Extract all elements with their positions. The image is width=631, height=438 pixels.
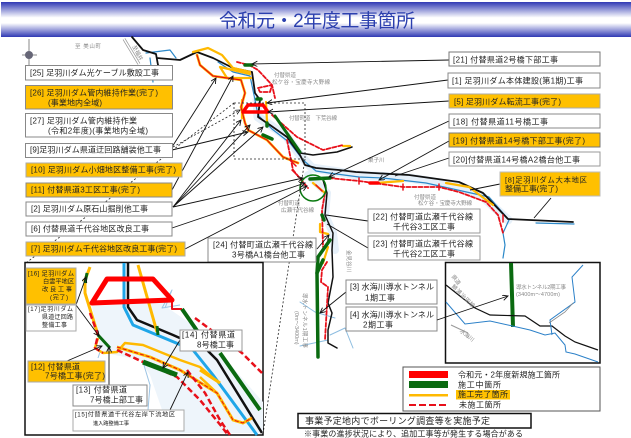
leader arrows [172,60,551,313]
panel: right inset map: 鯖浦治田線 [450,282,477,310]
box 16: [16] 足羽川ダム [28,268,74,278]
icon: compass [22,39,37,66]
inset river [446,265,598,362]
box 12: 7号橋工事(完了) [45,370,105,380]
label boxes: right column [346,52,600,331]
box 15: 進入路整備工事 [93,419,130,427]
box 22: [22] 付替町道広瀬千代谷線 [373,212,473,222]
box 11 [26,183,172,197]
green works [245,65,330,357]
box 12: [12] 付替県道 [31,362,80,372]
box 26: [26] 足羽川ダム管内維持作業(完了) [30,88,158,98]
black road [132,37,573,222]
box 24 [208,238,316,262]
box 13: [13] 付替県道 [76,384,127,394]
box 6: [6] 付替県道千代谷地区改良工事 [31,224,149,234]
panel: right inset map [446,262,600,363]
arrow: direction to Fukui [124,39,145,64]
box 3: [3] 水海川導水トンネル [350,282,434,292]
reservoir [257,100,508,220]
callout: boring survey: 事業予定地内でボーリング調査等を実施予定 [305,415,490,426]
box 24: 3号橋A1橋台他工事 [232,250,305,260]
inset black road [128,263,262,433]
box 16: 白霊平地区 [43,278,74,286]
box 16 [26,268,76,304]
map labels: 付替県道 [274,71,297,79]
map labels [272,71,472,348]
box 7 [26,242,185,256]
box 23: [23] 付替町道広瀬千代谷線 [373,238,473,248]
title: 令和元・2年度工事箇所 [219,10,415,32]
box 12 [28,361,105,382]
inset tunnel [511,263,513,327]
box 16: 改良工事 [42,286,72,294]
box 27: (令和2年度)(事業地内全域) [48,126,148,136]
box 3 [346,280,437,304]
box 22 [368,209,480,233]
box 19: [19] 付替県道14号橋下部工事(完了) [453,136,585,146]
box 9: [9]足羽川ダム県道迂回路舗装他工事 [30,144,161,154]
box 18: [18] 付替県道11号橋工事 [453,116,548,126]
blue rivers [146,50,574,258]
box 15 [73,410,184,431]
inset red dashed lines [90,313,262,435]
arrow: tunnel phase 2 [437,296,508,320]
map labels: 付替県道 [414,193,437,201]
box 13: 7号橋上部工事 [90,394,143,404]
box 3: 1期工事 [365,292,395,302]
box 23: 千代谷2工区工事 [393,248,455,258]
inset new works [92,279,172,303]
box 17: 整備工事 [42,321,67,329]
map labels: 松ケ谷・宝慶寺大野線 [272,78,330,86]
box 14: [14] 付替県道 [182,330,235,340]
legend [403,367,600,411]
yellow completed [193,48,493,263]
box 21: [21] 付替県道2号橋下部工事 [453,54,558,64]
box 27 [26,114,172,137]
box 13 [73,384,147,406]
box 8 [500,172,600,196]
main map [132,37,574,357]
box 16: (完了) [50,294,68,302]
inset road [446,285,598,350]
box 26: (事業地内全域) [48,98,102,108]
box 25 [26,66,172,80]
box 19 [449,133,600,147]
box 20: [20]付替県道14号橋A2橋台他工事 [453,154,580,164]
legend: 令和元・2年度新規施工箇所 [458,370,560,380]
red dashed [237,62,503,340]
map labels: 付替町道 下荒谷線 [289,114,337,122]
box 24: [24] 付替町道広瀬千代谷線 [213,240,313,250]
box 1: [1] 足羽川ダム本体建設(第1期)工事 [452,76,583,86]
inset green works [85,273,260,410]
box 4: 2期工事 [363,320,393,330]
inset blue river [124,263,257,435]
box 4 [346,307,437,331]
map labels: 導水トンネル1期工事 [301,293,309,348]
box 4: [4] 水海川導水トンネル [350,310,434,320]
map labels: 広瀬千代谷線 [281,206,314,214]
legend: 施工完了箇所 [458,389,508,399]
callout: boring survey [298,414,531,428]
panel: right inset map: 県道 [450,273,463,287]
box 8: [8]足羽川ダム大本地区 [505,176,588,184]
box 17 [26,305,76,331]
box 11: [11] 付替県道3工区工事(完了) [31,184,140,194]
box 5 [449,94,600,108]
box 10: [10] 足羽川ダム小畑地区整備工事(完了) [31,164,176,174]
legend: 未施工箇所 [459,400,501,410]
map labels: 金見谷川 [345,250,353,272]
inset tributaries [98,290,180,410]
box 26 [26,86,172,109]
box 6 [26,222,172,236]
inset yellow lines [85,265,157,335]
box 1 [448,73,600,88]
map labels: (0m～3400m) [293,311,299,345]
map labels: 巣子川 [368,156,385,164]
box 8: 整備工事(完了) [505,184,558,194]
box 7: [7] 足羽川ダム千代谷地区改良工事(完了) [31,244,177,254]
box 20 [449,152,600,166]
box 17: 県道迂回路 [42,313,73,321]
box 5: [5] 足羽川ダム転流工事(完了) [454,96,561,106]
legend: 施工中箇所 [458,380,501,390]
panel: right inset map: (3400m～4700m) [516,292,560,298]
box 10 [26,163,182,177]
label boxes: left column [26,66,316,262]
title [1,2,631,37]
label: direction to Miyama: 至 美山町 [75,42,101,50]
box 17: [17]足羽川ダム [28,305,73,313]
box 2: [2] 足羽川ダム原石山掘削他工事 [31,204,148,214]
inset labels: 導水トンネル2期工事 [516,283,566,291]
red new works [243,105,268,112]
box 27: [27] 足羽川ダム管内維持作業 [30,116,137,126]
red markers [290,160,503,222]
inset leader lines [67,277,188,410]
box 22: 千代谷3工区工事 [393,222,455,232]
inset water [92,302,263,433]
box 25: [25] 足羽川ダム光ケーブル敷設工事 [30,68,159,78]
box 2 [26,202,172,216]
panel: right inset map: 水海川 [458,327,476,344]
box 23 [368,236,480,260]
panel: left inset map [25,262,263,435]
box 9 [26,144,172,158]
box 21 [449,52,600,66]
map labels: 松ケ谷・宝慶寺大野線 [418,199,472,207]
map labels: 付替町道 [278,199,301,207]
box 14 [180,330,242,351]
box 18 [449,114,600,128]
box 15: [15]付替県道千代谷左岸下流地区 [75,410,175,418]
box 14: 8号橋工事 [197,340,234,350]
arrow: direction to Fukui: 至福井 [130,44,145,62]
dashed inset guides [26,103,305,434]
